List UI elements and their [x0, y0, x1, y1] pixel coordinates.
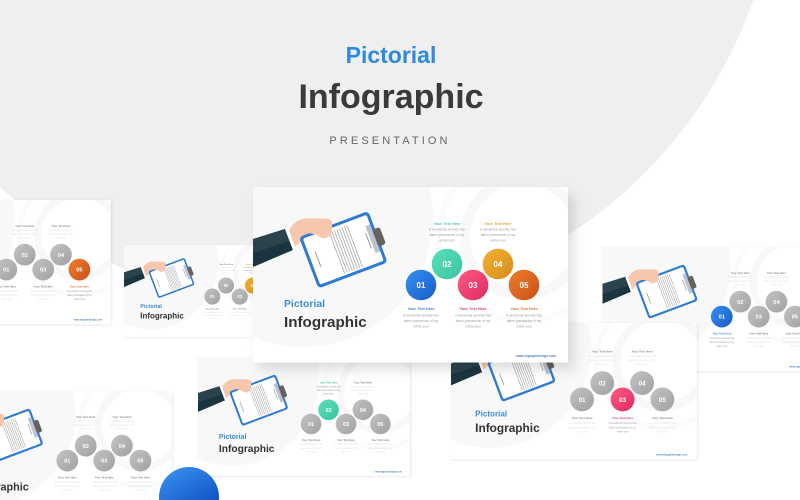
slide preview: bottom left, all steps grey: A wonderful serenity has — [73, 420, 99, 423]
slide preview: right lower, step 03 highlighted: 03 — [619, 397, 627, 404]
slide preview: bottom centre, step 02 highlighted: 05 — [377, 422, 383, 428]
slide preview: left middle, step 04 highlighted: taken possession of my — [244, 269, 262, 272]
slide preview: right lower, step 03 highlighted: Your Text Here — [592, 350, 613, 354]
slide preview: right lower, step 03 highlighted: taken possession of my — [609, 425, 637, 429]
step 01: Your Text Here — [407, 306, 435, 311]
slide preview: bottom left, all steps grey: 02 — [83, 444, 89, 450]
slide preview: bottom centre, step 02 highlighted: entire soul — [358, 393, 369, 396]
slide preview: right upper, step 01 highlighted: 01 — [719, 315, 725, 321]
website url: www.ingraphdesign.com — [515, 354, 556, 358]
slide preview: bottom left, all steps grey: entire soul — [117, 428, 128, 431]
slide preview: bottom left, all steps grey: taken possession of my — [110, 424, 135, 427]
step 05: 05 — [520, 281, 529, 290]
slide preview: top left, step 05 highlighted: Your Text Here — [15, 224, 35, 228]
slide preview: bottom left, all steps grey: 03 — [101, 459, 107, 465]
slide preview: right lower, step 03 highlighted: www.ingraphdesign.com — [656, 453, 688, 457]
slide preview: top left, step 05 highlighted: A wonderful serenity has — [48, 229, 74, 232]
step 05: taken possession of my — [507, 319, 542, 323]
slide preview: top left, step 05 highlighted: entire soul — [56, 237, 67, 240]
slide preview: top left, step 05 highlighted: 05 — [76, 268, 83, 274]
slide preview: right lower, step 03 highlighted: 01 — [579, 397, 586, 404]
slide preview: bottom centre, step 02 highlighted: A wonderful serenity has — [316, 385, 342, 388]
slide preview: bottom left, all steps grey: taken possession of my — [55, 485, 80, 488]
slide preview: top left, step 05 highlighted: entire soul — [74, 298, 85, 301]
slide preview: bottom centre, step 02 highlighted: A wonderful serenity has — [334, 443, 359, 446]
slide preview: right lower, step 03 highlighted: A wonderful serenity has — [568, 421, 597, 425]
step 04: Your Text Here — [484, 221, 512, 226]
slide preview: right lower, step 03 highlighted: entire soul — [576, 430, 588, 434]
slide preview: bottom centre, step 02 highlighted: taken possession of my — [369, 447, 393, 450]
slide preview: right lower, step 03 highlighted: taken possession of my — [649, 425, 676, 429]
slide preview: bottom left, all steps grey: A wonderful serenity has — [55, 481, 81, 484]
slide preview: bottom centre, step 02 highlighted — [198, 362, 412, 477]
slide preview: right upper, step 01 highlighted: taken possession of my — [710, 341, 735, 344]
slide preview: right upper, step 01 highlighted: entire soul — [790, 345, 800, 348]
slide preview: right upper, step 01 highlighted — [602, 264, 800, 372]
step 01 — [403, 270, 439, 328]
step 04: taken possession of my — [481, 233, 516, 237]
slide preview: bottom centre, step 02 highlighted: 02 — [326, 408, 332, 414]
slide preview: bottom left, all steps grey: entire soul — [80, 428, 92, 431]
step 02: Your Text Here — [433, 221, 461, 226]
slide preview: left middle, step 04 highlighted: entire soul — [236, 317, 244, 320]
main slide: all steps coloured — [253, 187, 578, 374]
slide preview: right upper, step 01 highlighted: A wonderful serenity has — [709, 337, 735, 340]
step 05: Your Text Here — [510, 306, 538, 311]
slide preview: bottom centre, step 02 highlighted: Your Text Here — [371, 438, 390, 442]
slide preview: left middle, step 04 highlighted: taken possession of my — [203, 314, 221, 317]
slide preview: right upper, step 01 highlighted: taken possession of my — [728, 280, 753, 283]
step 02: 02 — [443, 260, 452, 269]
slide preview: left middle, step 04 highlighted: Your Text Here — [233, 308, 248, 311]
slide preview: right upper, step 01 highlighted: entire soul — [753, 345, 765, 348]
step 01: A wonderful serenity has — [403, 314, 439, 318]
slide preview: bottom centre, step 02 highlighted: taken possession of my — [334, 447, 359, 450]
slide preview: bottom centre, step 02 highlighted: Your Text Here — [354, 381, 373, 385]
slide preview: bottom left, all steps grey: A wonderful serenity has — [109, 420, 135, 423]
decorative blue circle — [159, 467, 219, 500]
slide preview: top left, step 05 highlighted: 02 — [22, 253, 28, 259]
slide preview: top left, step 05 highlighted: 03 — [40, 268, 46, 274]
slide preview: top left, step 05 highlighted: entire soul — [38, 298, 49, 301]
slide preview: left middle, step 04 highlighted: taken possession of my — [231, 314, 249, 317]
slide preview: right upper, step 01 highlighted: entire soul — [716, 345, 728, 348]
slide preview: right lower, step 03 highlighted — [451, 324, 698, 461]
slide preview: left middle, step 04 highlighted: A wonderful serenity has — [203, 311, 222, 314]
slide preview: top left, step 05 highlighted: taken possession of my — [13, 233, 38, 236]
slide preview: bottom centre, step 02 highlighted: A wonderful serenity has — [351, 385, 376, 388]
subheading: presentation: PRESENTATION — [329, 135, 451, 147]
slide preview: bottom centre, step 02 highlighted: taken possession of my — [317, 389, 341, 392]
slide preview: bottom left, all steps grey: Your Text Here — [58, 475, 77, 479]
slide preview: left middle, step 04 highlighted: Your Text Here — [219, 263, 234, 266]
slide preview: bottom centre, step 02 highlighted: taken possession of my — [299, 447, 324, 450]
slide preview: right lower, step 03 highlighted: entire soul — [636, 363, 648, 367]
slide preview: bottom left, all steps grey: Your Text Here — [112, 415, 132, 419]
slide preview: right upper, step 01 highlighted: Your Text Here — [767, 271, 786, 275]
slide preview: bottom centre, step 02 highlighted: A wonderful serenity has — [299, 443, 324, 446]
slide preview: bottom centre, step 02 highlighted: A wonderful serenity has — [368, 443, 393, 446]
step 03: entire soul — [465, 324, 481, 328]
slide preview: top left, step 05 highlighted: 01 — [3, 268, 9, 274]
slide preview: top left, step 05 highlighted: A wonderful serenity has — [31, 290, 57, 293]
slide preview: right upper, step 01 highlighted: taken possession of my — [747, 341, 772, 344]
slide preview: bottom left, all steps grey: 05 — [137, 459, 144, 465]
slide preview: right upper, step 01 highlighted: A wonderful serenity has — [746, 337, 772, 340]
step 05 — [506, 270, 542, 328]
slide preview: right upper, step 01 highlighted: entire soul — [735, 284, 746, 287]
step 04: entire soul — [490, 238, 506, 242]
slide preview: bottom centre, step 02 highlighted: Your Text Here — [302, 438, 321, 442]
step 03: taken possession of my — [456, 319, 491, 323]
slide preview: top left, step 05 highlighted: 04 — [58, 253, 65, 259]
slide preview: right upper, step 01 highlighted: taken possession of my — [764, 280, 789, 283]
step 03: A wonderful serenity has — [455, 314, 491, 318]
slide preview: bottom left, all steps grey: entire soul — [62, 489, 73, 492]
slide preview: bottom left, all steps grey: taken possession of my — [92, 485, 117, 488]
slide preview: left middle, step 04 highlighted: 01 — [210, 294, 215, 299]
slide preview: left middle, step 04 highlighted: entire soul — [249, 272, 257, 275]
background grey circle — [0, 0, 780, 310]
slide preview: top left, step 05 highlighted: entire soul — [19, 237, 31, 240]
slide preview: right lower, step 03 highlighted: entire soul — [596, 363, 609, 367]
slide title: Infographic: Infographic — [284, 314, 367, 331]
step 02: A wonderful serenity has — [429, 228, 465, 232]
slide preview: right upper, step 01 highlighted: entire soul — [771, 284, 782, 287]
slide preview: top left, step 05 highlighted — [0, 200, 112, 326]
slide preview: right upper, step 01 highlighted: Your Text Here — [749, 331, 769, 335]
slide preview: right lower, step 03 highlighted: Your Text Here — [652, 416, 673, 420]
slide preview: bottom centre, step 02 highlighted: 03 — [343, 422, 349, 428]
slide preview: top left, step 05 highlighted: Your Text Here — [51, 224, 71, 228]
slide preview: bottom centre, step 02 highlighted: www.ingraphdesign.com — [375, 471, 402, 473]
slide preview: right upper, step 01 highlighted: A wonderful serenity has — [728, 276, 754, 279]
slide preview: left middle, step 04 highlighted: 03 — [237, 294, 243, 299]
slide preview: top left, step 05 highlighted: A wonderful serenity has — [67, 290, 93, 293]
slide preview: left middle, step 04 highlighted: Pictorial — [140, 304, 162, 310]
slide preview: left middle, step 04 highlighted — [124, 245, 253, 338]
step 03: Your Text Here — [459, 306, 487, 311]
step 03: 03 — [469, 281, 478, 290]
slide preview: top left, step 05 highlighted: taken possession of my — [31, 294, 56, 297]
slide preview: right lower, step 03 highlighted: Pictorial — [475, 410, 507, 419]
step 05: A wonderful serenity has — [506, 314, 542, 318]
slide preview: bottom centre, step 02 highlighted: entire soul — [306, 451, 317, 454]
slide preview: bottom left, all steps grey: 01 — [64, 459, 70, 465]
slide preview: bottom centre, step 02 highlighted: entire soul — [375, 451, 386, 454]
slide preview: bottom centre, step 02 highlighted: taken possession of my — [351, 389, 375, 392]
slide preview: top left, step 05 highlighted: taken possession of my — [67, 294, 92, 297]
slide preview: bottom centre, step 02 highlighted: entire soul — [323, 393, 334, 396]
slide preview: left middle, step 04 highlighted: taken possession of my — [217, 269, 235, 272]
slide preview: right lower, step 03 highlighted: taken possession of my — [589, 358, 616, 362]
slide preview: bottom centre, step 02 highlighted: Your Text Here — [337, 438, 356, 442]
slide preview: right lower, step 03 highlighted: Your Text Here — [571, 416, 593, 420]
slide preview: top left, step 05 highlighted: taken possession of my — [49, 233, 74, 236]
slide preview: top left, step 05 highlighted: entire soul — [1, 298, 12, 301]
slide preview: left middle, step 04 highlighted: A wonderful serenity has — [244, 266, 262, 269]
step 05: entire soul — [516, 324, 532, 328]
heading: Infographic: Infographic — [298, 78, 484, 116]
slide preview: bottom left, all steps grey: Your Text Here — [95, 475, 114, 479]
slide preview: left middle, step 04 highlighted: entire soul — [222, 272, 231, 275]
slide preview: right lower, step 03 highlighted: A wonderful serenity has — [609, 421, 637, 425]
slide preview: right lower, step 03 highlighted: entire soul — [617, 430, 629, 434]
slide preview: right upper, step 01 highlighted: 04 — [773, 300, 780, 306]
slide preview: bottom left, all steps grey: A wonderful serenity has — [92, 481, 118, 484]
heading: Pictorial: Pictorial — [346, 42, 436, 68]
slide preview: right lower, step 03 highlighted: 05 — [659, 397, 666, 404]
slide preview: right lower, step 03 highlighted: taken possession of my — [629, 358, 656, 362]
slide preview: bottom left, all steps grey: 04 — [119, 444, 126, 450]
slide preview: left middle, step 04 highlighted: A wonderful serenity has — [217, 266, 236, 269]
step 01: entire soul — [413, 324, 429, 328]
slide preview: top left, step 05 highlighted: Your Text Here — [70, 284, 89, 288]
slide preview: right lower, step 03 highlighted: entire soul — [656, 430, 669, 434]
slide preview: bottom centre, step 02 highlighted: Your Text Here — [319, 381, 338, 385]
icon: hand holding clipboard — [253, 209, 392, 288]
slide preview: right lower, step 03 highlighted: 04 — [639, 380, 646, 387]
slide preview: bottom left, all steps grey — [0, 392, 173, 493]
slide preview: bottom centre, step 02 highlighted: Infographic — [219, 444, 275, 455]
slide preview: left middle, step 04 highlighted: Your Text Here — [246, 263, 261, 266]
step 04 — [480, 221, 516, 279]
slide preview: right lower, step 03 highlighted: Your Text Here — [612, 416, 633, 420]
slide preview: right lower, step 03 highlighted: A wonderful serenity has — [648, 421, 677, 425]
slide preview: right lower, step 03 highlighted: Your Text Here — [632, 350, 653, 354]
slide preview: bottom centre, step 02 highlighted: 04 — [360, 408, 366, 414]
slide preview: left middle, step 04 highlighted: Your Text Here — [205, 308, 220, 311]
slide preview: bottom left, all steps grey: entire soul — [135, 489, 146, 492]
slide preview: right upper, step 01 highlighted: Your Text Here — [712, 331, 732, 335]
step 02: entire soul — [439, 238, 455, 242]
slide preview: bottom centre, step 02 highlighted: 01 — [308, 422, 314, 428]
slide preview: right upper, step 01 highlighted: Your Text Here — [731, 271, 750, 275]
slide preview: right upper, step 01 highlighted: 02 — [737, 300, 743, 306]
slide preview: right upper, step 01 highlighted: A wonderful serenity has — [764, 276, 790, 279]
slide preview: left middle, step 04 highlighted: Infographic — [140, 312, 184, 321]
slide preview: bottom centre, step 02 highlighted: entire soul — [341, 451, 352, 454]
step 02: taken possession of my — [430, 233, 465, 237]
slide preview: top left, step 05 highlighted: A wonderful serenity has — [12, 229, 38, 232]
slide preview: left middle, step 04 highlighted: entire soul — [208, 317, 217, 320]
slide preview: left middle, step 04 highlighted: 04 — [251, 283, 256, 288]
slide preview: right upper, step 01 highlighted: 03 — [756, 315, 762, 321]
slide preview: bottom left, all steps grey: Your Text Here — [131, 475, 150, 479]
slide preview: top left, step 05 highlighted: Your Text Here — [34, 284, 53, 288]
step 01: 01 — [417, 281, 426, 290]
slide preview: top left, step 05 highlighted: www.ingraphdesign.com — [74, 319, 102, 322]
slide preview: right lower, step 03 highlighted: A wonderful serenity has — [628, 354, 657, 358]
step 04: A wonderful serenity has — [480, 228, 516, 232]
slide preview: bottom left, all steps grey: taken possession of my — [128, 485, 153, 488]
step 04: 04 — [494, 260, 503, 269]
slide preview: right lower, step 03 highlighted: taken possession of my — [569, 425, 596, 429]
step 02 — [429, 221, 465, 279]
slide title: Pictorial: Pictorial — [284, 299, 325, 310]
slide preview: bottom left, all steps grey: taken possession of my — [74, 424, 99, 427]
step 03 — [455, 270, 491, 328]
slide preview: bottom left, all steps grey: A wonderful serenity has — [128, 481, 154, 484]
step 01: taken possession of my — [404, 319, 439, 323]
slide preview: right lower, step 03 highlighted: A wonderful serenity has — [588, 354, 617, 358]
slide preview: left middle, step 04 highlighted: A wonderful serenity has — [230, 311, 249, 314]
slide preview: bottom left, all steps grey: Your Text Here — [76, 415, 96, 419]
slide preview: bottom left, all steps grey: entire soul — [99, 489, 110, 492]
slide preview: left middle, step 04 highlighted: 02 — [224, 283, 229, 288]
slide preview: bottom centre, step 02 highlighted: Pictorial — [219, 434, 246, 441]
slide preview: right lower, step 03 highlighted: Infographic — [475, 421, 540, 435]
slide preview: right lower, step 03 highlighted: 02 — [599, 380, 606, 387]
slide preview: right upper, step 01 highlighted: 05 — [792, 315, 798, 321]
